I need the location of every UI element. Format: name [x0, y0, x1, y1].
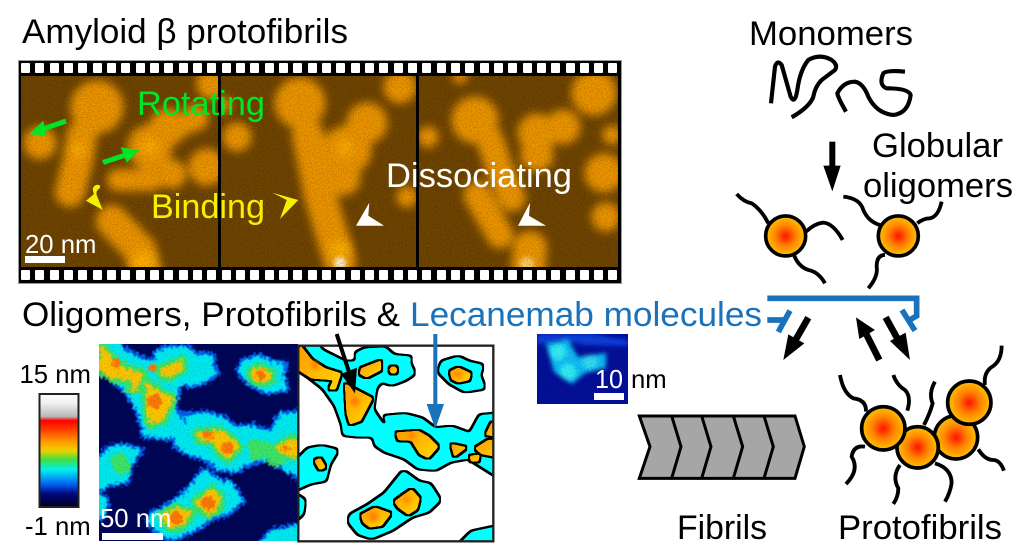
icon: fibril chevrons: [639, 416, 804, 478]
scale label: 50 nm: 50 nm: [100, 505, 171, 533]
icon: white arrowhead frame 3: [518, 203, 546, 226]
scale label: nm: nm: [631, 366, 667, 394]
arrow: green rotating right: [103, 147, 139, 163]
AFM frame 3: [418, 69, 623, 272]
arrow: oligomers to protofibrils: [886, 317, 910, 360]
frame dividers: [218, 76, 419, 267]
icon: monomer strands: [771, 57, 911, 117]
contour map: [297, 333, 494, 542]
icon: yellow arrowhead: [272, 193, 298, 219]
arrow: green rotating left: [29, 121, 66, 136]
sprocket holes top: [21, 63, 617, 73]
icon: globular oligomer left: [737, 194, 843, 283]
label: -1 nm: -1 nm: [25, 513, 91, 541]
icon: protofibril cluster: [840, 346, 1004, 504]
label: Globular oligomers: [863, 127, 1013, 205]
orange centres: [311, 361, 462, 521]
label: Globular oligomers: Globular: [872, 127, 1003, 165]
icon: globular oligomer right: [843, 197, 942, 288]
label: Dissociating: Dissociating: [386, 157, 572, 195]
scale bar: 50 nm: [102, 533, 163, 540]
heading: oligomers, protofibrils and: Oligomers, Protofibrils &: [22, 296, 400, 334]
arrow: oligomers to fibrils: [783, 318, 808, 360]
colour scale legend: [20, 361, 91, 541]
colour bar: [40, 394, 78, 507]
AFM frame 1: [21, 76, 218, 267]
sprocket holes bottom: [21, 270, 617, 280]
label: Binding: Binding: [151, 188, 265, 226]
label: Fibrils: Fibrils: [677, 509, 767, 547]
arrow: blue pointing to lecanemab: [427, 334, 444, 429]
scale label: 10: 10: [595, 366, 623, 394]
arrow: black pointing to oligomer: [337, 334, 357, 393]
scale bar: 10 nm: [594, 393, 624, 400]
icon: white arrowhead frame 2: [356, 203, 384, 226]
label: Monomers: Monomers: [749, 15, 913, 53]
AFM height map: [99, 344, 298, 541]
arrow: protofibrils to oligomers: [856, 317, 879, 360]
scale label: 20 nm: 20 nm: [25, 231, 96, 259]
label: Protofibrils: Protofibrils: [838, 509, 1002, 547]
label: Rotating: Rotating: [137, 85, 265, 123]
AFM frame 2: [214, 71, 417, 269]
arrow: monomers to oligomers: [823, 142, 841, 191]
heading: Lecanemab molecules: Lecanemab molecules: [410, 296, 762, 334]
cyan regions: [300, 346, 492, 540]
icon: yellow curved arrowhead: [86, 185, 103, 210]
title: Amyloid beta protofibrils: Amyloid β protofibrils: [22, 13, 348, 51]
small AFM image of lecanemab: [537, 334, 667, 404]
label: 15 nm: 15 nm: [20, 361, 91, 389]
label: Globular oligomers: oligomers: [863, 167, 1013, 205]
panel: film strip of AFM frames: [18, 60, 623, 284]
scale bar: 20 nm: [25, 256, 65, 263]
orange core regions: [298, 345, 505, 527]
inhibition lines: lecanemab blocking: [767, 298, 917, 332]
